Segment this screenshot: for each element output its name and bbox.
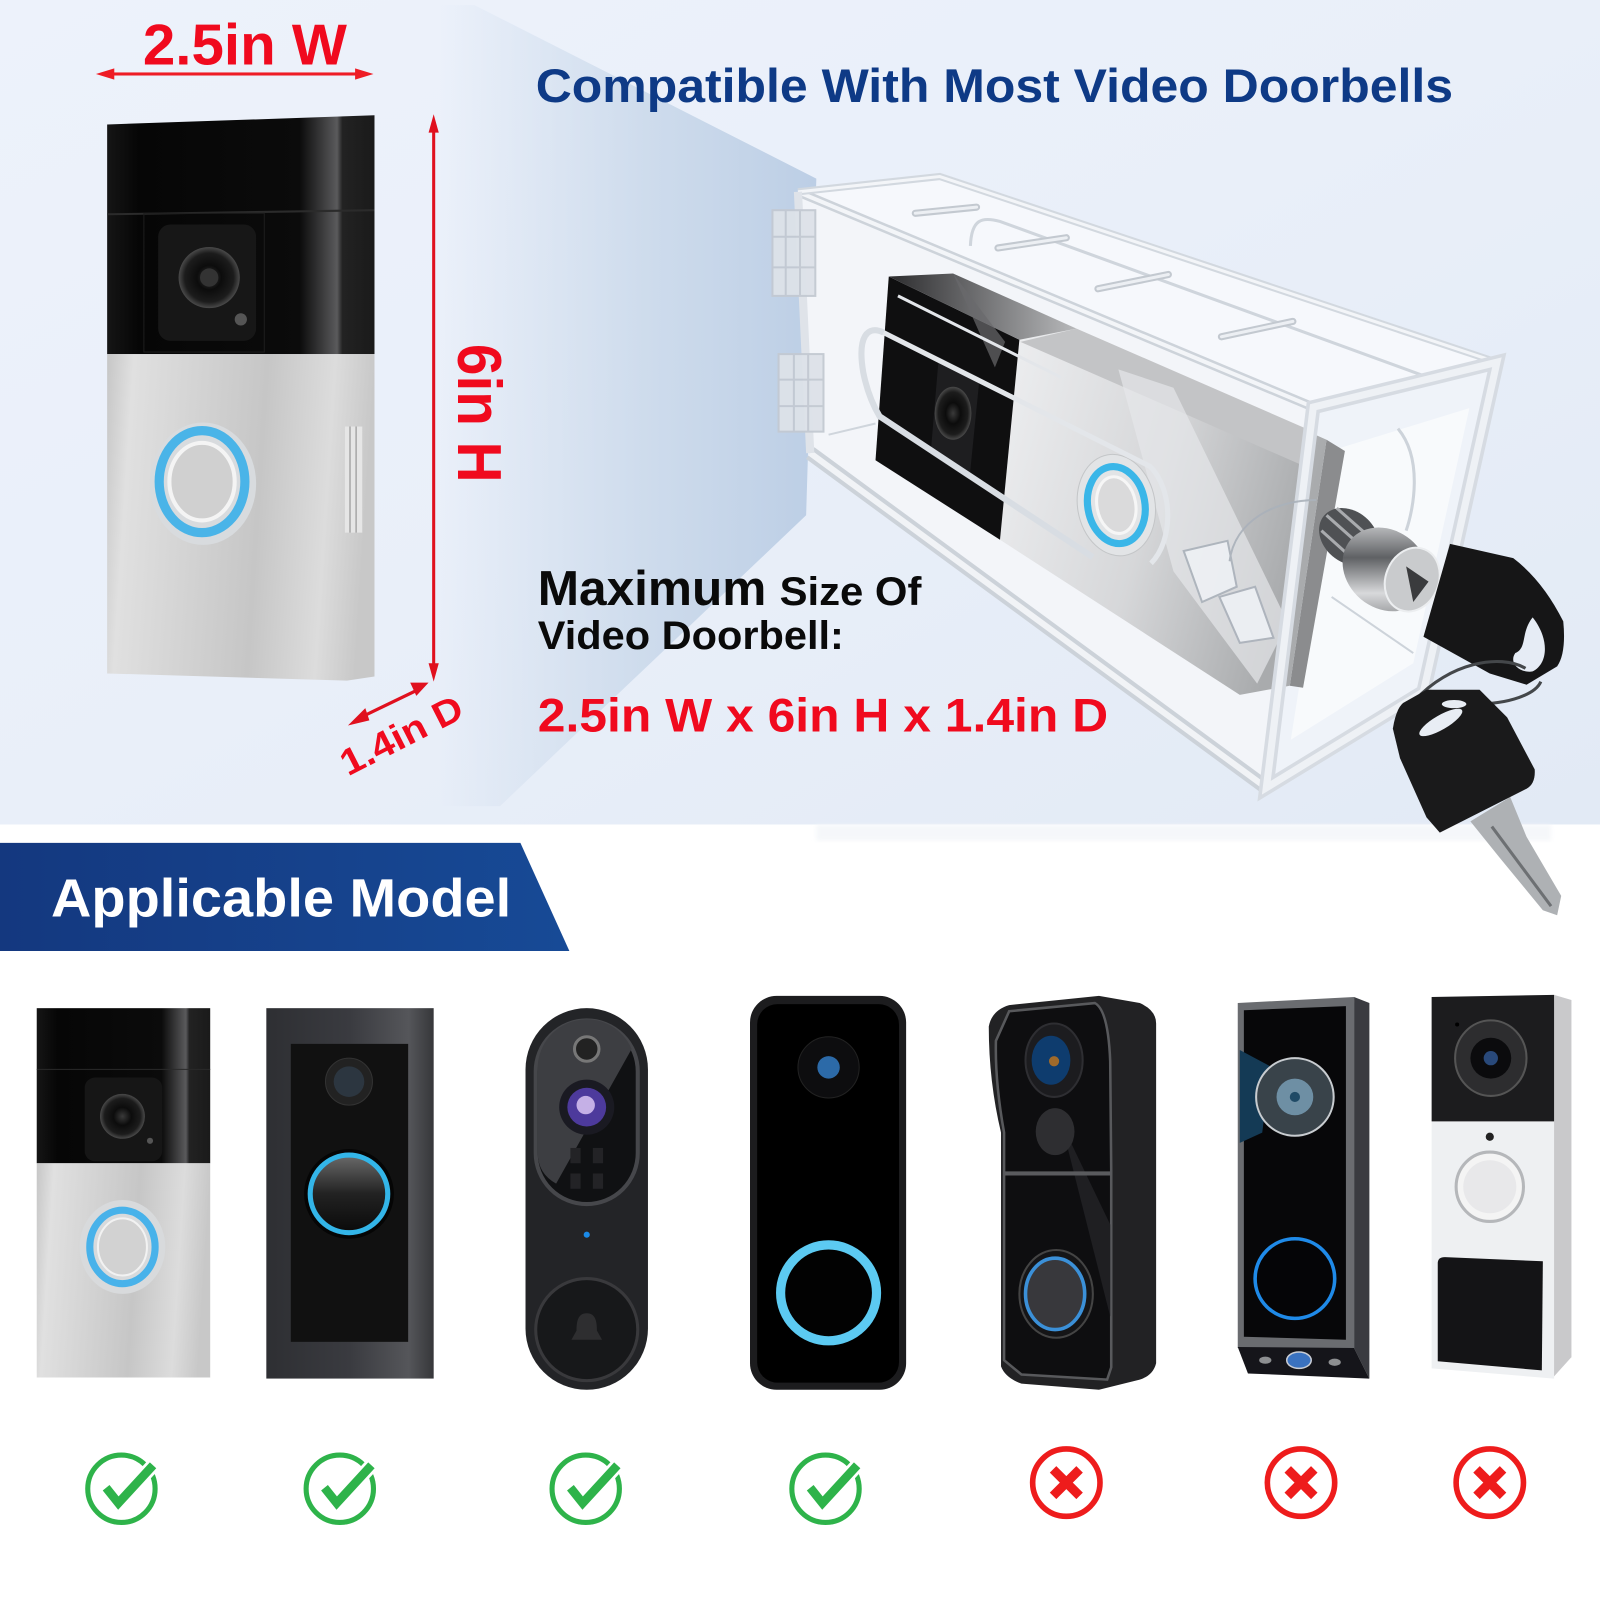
model 5: black angled doorbell (989, 996, 1156, 1390)
strap and box edges (798, 177, 1497, 788)
maximum size text (538, 562, 922, 658)
yes icon 1 (88, 1455, 155, 1522)
dimensions text: 2.5in W x 6in H x 1.4in D (538, 690, 1108, 742)
slots (915, 207, 1293, 337)
title: Compatible With Most Video Doorbells (536, 60, 1453, 112)
width label: 2.5in W (143, 13, 347, 77)
no icon 2 (1267, 1449, 1335, 1516)
caged doorbell (876, 273, 1345, 695)
yes icons (88, 1455, 859, 1522)
yes icon 2 (306, 1455, 373, 1522)
hinges (772, 210, 823, 432)
banner: applicable model (0, 843, 569, 951)
banner: applicable model: Applicable Model (51, 868, 511, 928)
model 4: black doorbell (750, 996, 906, 1390)
maximum size text: Video Doorbell: (538, 614, 844, 658)
height label: 6in H (444, 344, 513, 483)
acrylic lock box (772, 177, 1497, 788)
model 6: slim doorbell (1238, 997, 1369, 1379)
yes icon 4 (792, 1455, 859, 1522)
model 3: pill doorbell (526, 1008, 648, 1390)
depth label: 1.4in D (333, 687, 470, 784)
lock cylinder (1308, 496, 1449, 629)
model 7: white doorbell (1432, 995, 1571, 1379)
width arrow (96, 68, 373, 80)
maximum size text: Maximum (538, 562, 766, 616)
model 1: silver doorbell (37, 1008, 210, 1378)
key two (1393, 690, 1561, 915)
no icons (1033, 1449, 1523, 1516)
no icon 1 (1033, 1449, 1100, 1516)
latch (1184, 500, 1316, 643)
depth arrow (348, 683, 429, 726)
large doorbell (107, 115, 374, 681)
model 2: dark wired doorbell (266, 1008, 434, 1379)
key one (1415, 544, 1564, 704)
height arrow (429, 114, 439, 682)
top panel background (0, 0, 1600, 841)
maximum size text: Size Of (780, 570, 922, 614)
yes icon 3 (552, 1455, 619, 1522)
no icon 3 (1456, 1449, 1523, 1516)
